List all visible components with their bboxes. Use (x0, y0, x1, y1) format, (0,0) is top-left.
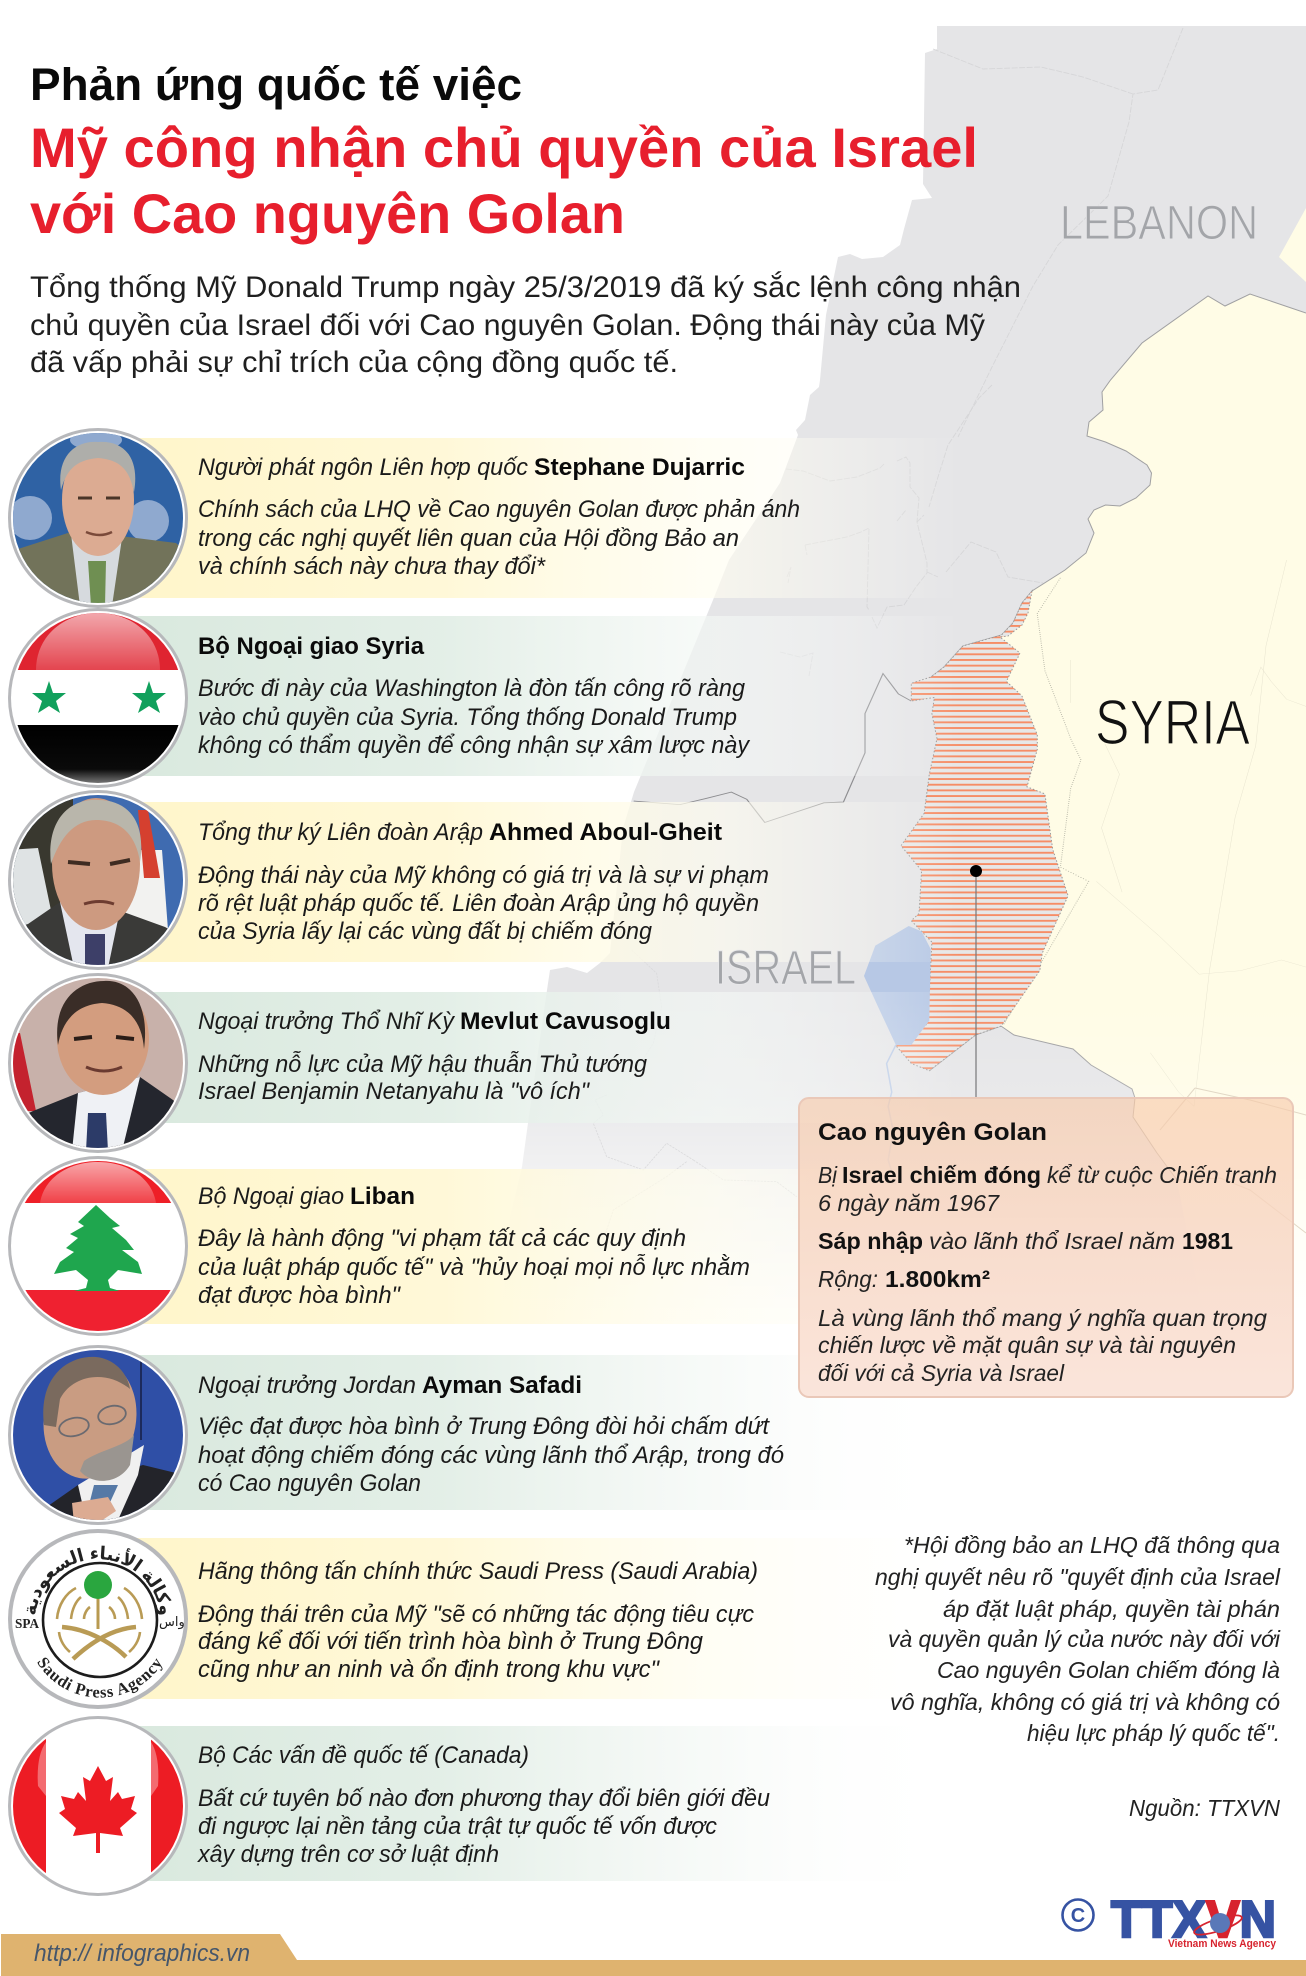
title line 1: Phản ứng quốc tế việc (30, 59, 522, 110)
quote (198, 675, 751, 759)
quote: của Syria lấy lại các vùng đất bị chiếm đóng (198, 918, 652, 945)
logo: gold arcs and swords (57, 1588, 142, 1659)
quote: rõ rệt luật pháp quốc tế. Liên đoàn Arập ủng hộ quyền (198, 890, 759, 917)
map: Golan Heights hatched area (896, 591, 1068, 1071)
callout fact: occupation: Bị (818, 1162, 838, 1188)
panel: row 8 background (100, 1726, 960, 1881)
map: faint internal boundaries (780, 28, 1183, 676)
map: south Israel Jordan fade (0, 1000, 1306, 1340)
footnote (875, 1532, 1281, 1746)
heading: Ahmed Aboul-Gheit (489, 819, 722, 846)
icon: portrait Stephane Dujarric (8, 428, 188, 608)
callout fact: occupation (818, 1162, 1277, 1216)
quote: Bất cứ tuyên bố nào đơn phương thay đổi biên giới đều (198, 1785, 770, 1812)
callout fact: annexation: Sáp nhập (818, 1228, 923, 1254)
quote: xây dựng trên cơ sở luật định (197, 1841, 499, 1868)
logo: Arabic name: وكالة الأنباء السعودية (26, 1546, 172, 1614)
quote (198, 1413, 784, 1497)
title line 2: Mỹ công nhận chủ quyền của Israel (30, 116, 978, 179)
heading: Liban (350, 1183, 415, 1210)
quote: và chính sách này chưa thay đổi* (198, 553, 546, 580)
map: faint lines in Syria (1071, 560, 1306, 1106)
panel: row 6 background (100, 1355, 960, 1510)
map label: Israel: ISRAEL (715, 942, 856, 995)
map: dotted ceasefire line (1004, 578, 1089, 1024)
heading: Hãng thông tấn chính thức Saudi Press (Saudi Arabia) (198, 1558, 758, 1585)
panel: row 3 background (100, 802, 960, 962)
callout heading: Cao nguyên Golan (818, 1119, 1047, 1146)
row 4: Mevlut Cavusoglu (8, 973, 671, 1153)
heading: Bộ Các vấn đề quốc tế (Canada) (198, 1742, 529, 1769)
footnote: hiệu lực pháp lý quốc tế". (1027, 1720, 1280, 1746)
intro text (30, 271, 1021, 379)
heading: Ayman Safadi (422, 1372, 582, 1399)
logo: Arabic abbreviation: واس (159, 1614, 185, 1630)
footer url: http:// infographics.vn (34, 1940, 250, 1967)
logo: copyright and TTXVN (1062, 1891, 1277, 1950)
heading (198, 454, 745, 481)
map: Israel Lebanon border (634, 674, 911, 822)
footnote: áp đặt luật pháp, quyền tài phán (943, 1596, 1280, 1622)
row 2: Syria (8, 608, 751, 788)
quote: Động thái này của Mỹ không có giá trị và là sự vi phạm (198, 862, 769, 889)
footnote: vô nghĩa, không có giá trị và không có (890, 1689, 1280, 1715)
panel: row 1 background (100, 438, 960, 598)
panel: row 5 background (100, 1169, 960, 1324)
map: Jordan river (887, 1045, 896, 1185)
quote: hoạt động chiếm đóng các vùng lãnh thổ Arập, trong đó (198, 1442, 784, 1469)
map label: Syria: SYRIA (1095, 688, 1250, 758)
callout fact: occupation: Israel chiếm đóng (842, 1162, 1041, 1188)
callout fact: significance: Là vùng lãnh thổ mang ý nghĩa quan trọng (818, 1305, 1267, 1331)
footer bar (1, 1934, 1306, 1976)
callout fact: occupation: 6 ngày năm 1967 (818, 1190, 1000, 1216)
quote: đáng kể đối với tiến trình hòa bình ở Trung Đông (198, 1628, 703, 1655)
heading: Người phát ngôn Liên hợp quốc (198, 454, 528, 481)
callout fact: significance: đối với cả Syria và Israel (818, 1360, 1065, 1386)
quote: cũng như an ninh và ổn định trong khu vực" (198, 1656, 660, 1683)
quote: Bước đi này của Washington là đòn tấn công rõ ràng (198, 675, 745, 702)
heading: Bộ Ngoại giao (198, 1183, 344, 1210)
footnote: Cao nguyên Golan chiếm đóng là (937, 1657, 1280, 1683)
intro text: Tổng thống Mỹ Donald Trump ngày 25/3/2019 đã ký sắc lệnh công nhận (30, 271, 1021, 304)
icon: Canada flag (8, 1716, 189, 1896)
callout fact: occupation: kể từ cuộc Chiến tranh (1047, 1162, 1277, 1188)
logo wordmark: TTXVN (1111, 1891, 1276, 1949)
map (0, 26, 1306, 1340)
panel: row 4 background (100, 992, 960, 1123)
map: lower Jordan Syria border and lines (1133, 1088, 1306, 1233)
heading: Tổng thư ký Liên đoàn Arập (198, 819, 483, 846)
logo: SPA: SPA (15, 1616, 39, 1631)
quote (198, 1050, 647, 1105)
title line 3: với Cao nguyên Golan (30, 182, 625, 245)
map: Sea of Galilee (864, 926, 931, 1045)
map: Syria border outline (929, 294, 1306, 1098)
heading (198, 819, 722, 846)
icon: cedar (54, 1205, 142, 1291)
icon: Saudi Press Agency logo (8, 1529, 188, 1709)
row 8: Canada (8, 1716, 770, 1896)
heading: Mevlut Cavusoglu (460, 1008, 671, 1035)
quote: của luật pháp quốc tế" và "hủy hoại mọi nỗ lực nhằm (198, 1253, 750, 1281)
row 7: Saudi Press Agency (8, 1529, 758, 1709)
intro text: chủ quyền của Israel đối với Cao nguyên Golan. Động thái này của Mỹ (30, 309, 985, 342)
map: Syria sliver north (1279, 208, 1306, 282)
icon: Syria flag (8, 608, 188, 788)
icon: portrait Ayman Safadi (8, 1345, 188, 1525)
map: Syria territory (1000, 294, 1306, 1335)
icon: copyright: C (1071, 1905, 1085, 1927)
row 5: Lebanon (8, 1156, 750, 1336)
icon: portrait Ahmed Aboul-Gheit (8, 790, 188, 970)
map: land gray (500, 26, 1306, 1330)
logo: palm (84, 1571, 112, 1629)
map label: Lebanon: LEBANON (1060, 197, 1258, 250)
quote: Động thái trên của Mỹ "sẽ có những tác động tiêu cực (198, 1601, 754, 1628)
heading: Bộ Ngoại giao Syria (198, 633, 424, 660)
callout fact: annexation (818, 1228, 1233, 1254)
intro text: đã vấp phải sự chỉ trích của cộng đồng quốc tế. (30, 346, 678, 379)
heading (198, 1008, 671, 1035)
footnote: nghị quyết nêu rõ "quyết định của Israel (875, 1564, 1281, 1590)
panel: row 7 background (100, 1538, 960, 1699)
quote: Chính sách của LHQ về Cao nguyên Golan được phản ánh (198, 496, 800, 523)
heading: Ngoại trưởng Jordan (198, 1372, 416, 1399)
map: faint lines in south (593, 950, 797, 1250)
quote: đi ngược lại nền tảng của trật tự quốc tế vốn được (198, 1813, 717, 1840)
quote (198, 496, 800, 580)
row 1: Stephane Dujarric (8, 428, 800, 608)
quote: Những nỗ lực của Mỹ hậu thuẫn Thủ tướng (198, 1050, 647, 1078)
map pin and leader line (970, 865, 982, 1098)
quote (198, 1225, 750, 1309)
footnote: và quyền quản lý của nước này đối với (888, 1626, 1281, 1652)
row 6: Ayman Safadi (8, 1345, 784, 1525)
quote: trong các nghị quyết liên quan của Hội đồng Bảo an (198, 525, 739, 552)
icon: maple leaf (59, 1766, 137, 1853)
quote: không có thẩm quyền để công nhận sự xâm lược này (198, 732, 751, 759)
callout fact: significance (818, 1305, 1267, 1386)
quote: Đây là hành động "vi phạm tất cả các quy định (198, 1225, 686, 1252)
quote: đạt được hòa bình" (198, 1282, 401, 1309)
row 3: Ahmed Aboul-Gheit (8, 790, 769, 970)
logo: English name: Saudi Press Agency (38, 1658, 162, 1698)
callout fact: area: Rộng: (818, 1266, 878, 1292)
callout fact: annexation: 1981 (1182, 1228, 1233, 1254)
icon: globe and orbit (1192, 1912, 1244, 1938)
callout fact: significance: chiến lược về mặt quân sự và tài nguyên (818, 1332, 1236, 1358)
icon: Lebanon flag (8, 1156, 188, 1336)
quote (198, 862, 769, 945)
quote (197, 1785, 770, 1868)
callout fact: area: 1.800km² (885, 1266, 990, 1292)
source: Nguồn: TTXVN (1129, 1795, 1280, 1821)
heading: Stephane Dujarric (534, 454, 745, 481)
callout fact: area (818, 1266, 990, 1292)
panel: row 2 background (100, 616, 960, 776)
footnote: *Hội đồng bảo an LHQ đã thông qua (904, 1532, 1280, 1558)
quote: có Cao nguyên Golan (198, 1470, 421, 1497)
icon: copyright (1062, 1900, 1094, 1930)
quote: Việc đạt được hòa bình ở Trung Đông đòi hỏi chấm dứt (198, 1413, 770, 1440)
logo tagline: Vietnam News Agency (1168, 1938, 1277, 1950)
quote: vào chủ quyền của Syria. Tổng thống Donald Trump (198, 704, 737, 731)
callout: Golan Heights info box (799, 1098, 1293, 1397)
icon: portrait Mevlut Cavusoglu (8, 973, 188, 1153)
quote (198, 1601, 754, 1683)
quote: Israel Benjamin Netanyahu là "vô ích" (198, 1078, 590, 1105)
callout fact: annexation: vào lãnh thổ Israel năm (929, 1228, 1175, 1254)
title (30, 59, 978, 245)
heading: Ngoại trưởng Thổ Nhĩ Kỳ (198, 1008, 456, 1035)
heading (198, 1372, 582, 1399)
